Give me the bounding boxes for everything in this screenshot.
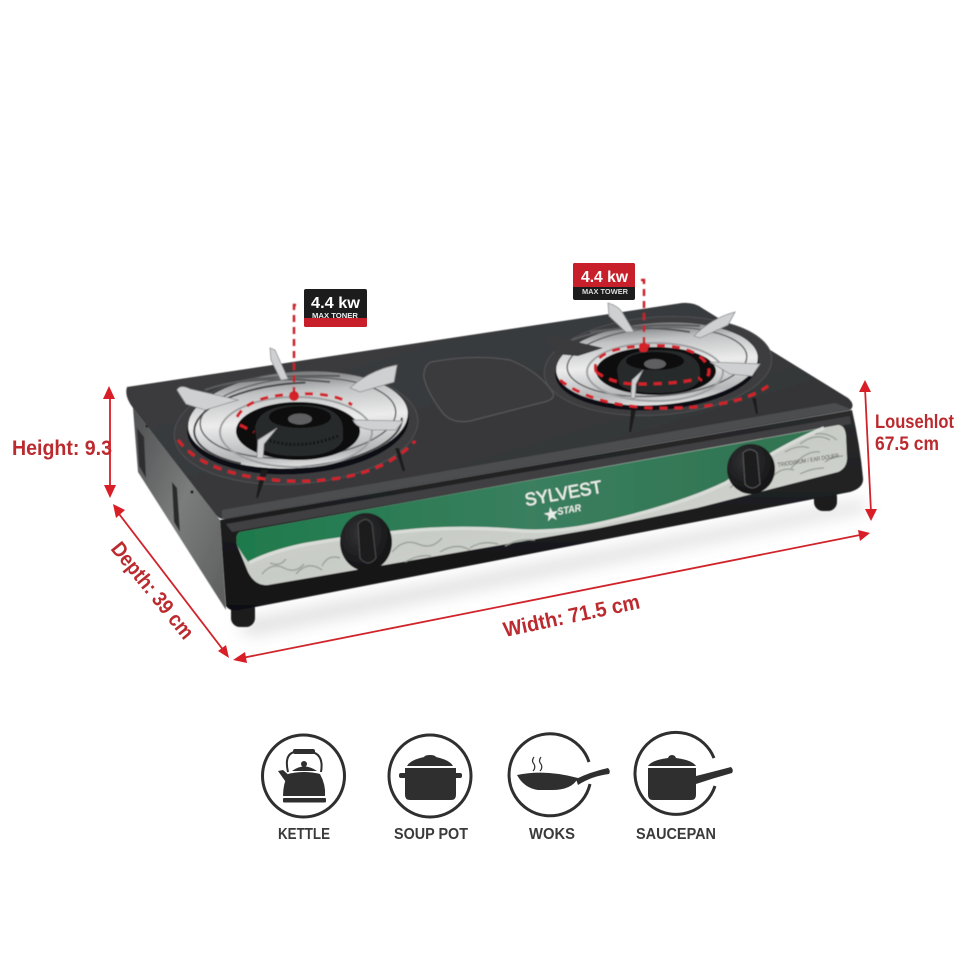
front body: [220, 410, 863, 610]
left burner: [170, 305, 422, 498]
label: saucepan: SAUCEPAN: [636, 826, 716, 843]
icon: soup pot: [389, 735, 471, 817]
height dimension: Height: 9.3: [12, 437, 112, 460]
green band: [236, 428, 824, 563]
brand logo: STAR: [557, 503, 583, 518]
dashed leader: [636, 280, 644, 344]
depth dimension: Depth: 39 cm: [106, 538, 198, 644]
red dashed circles: [178, 394, 415, 481]
callout: right burner power: [573, 263, 635, 300]
hob recess: [424, 357, 553, 422]
brand logo: [523, 477, 604, 527]
top plate front lip: [222, 403, 851, 519]
callout: right burner power: 4.4 kw: [581, 269, 629, 286]
fascia top band: [226, 416, 851, 532]
panel: front fascia: [226, 416, 851, 585]
label: soup pot: SOUP POT: [394, 826, 468, 843]
feet: [231, 488, 837, 627]
red marker dot: [289, 391, 299, 401]
ring reflections: [565, 322, 749, 402]
right knob: [727, 444, 775, 494]
right burner: [541, 280, 775, 432]
label: kettle: KETTLE: [278, 826, 330, 843]
icon: kettle: [262, 735, 344, 817]
lower support legs: [629, 398, 758, 432]
pan ring shadow: [552, 319, 762, 417]
height dimension: [12, 386, 116, 498]
ring reflections: [191, 371, 405, 474]
red dashed circles: [560, 345, 768, 408]
depth dimension: [106, 504, 229, 658]
width dimension: Width: 71.5 cm: [501, 590, 642, 642]
panel fine print: TRIODISIUM / EAR DOUER: [777, 453, 840, 469]
width dimension: [233, 530, 870, 663]
burner cap: [255, 405, 343, 456]
pan supports: [177, 348, 403, 458]
left knob: [340, 513, 392, 571]
outer recess ring: [541, 309, 775, 423]
outer recess ring: [170, 364, 422, 492]
pan ring steel: [553, 316, 761, 412]
right side dimension: 67.5 cm: [875, 434, 939, 455]
left side wall: [133, 408, 226, 610]
brand logo: SYLVEST: [523, 477, 604, 510]
dark support on left: [548, 335, 603, 356]
gas stove: [126, 280, 863, 627]
pan ring shadow: [184, 368, 412, 482]
callout: left burner power: 4.4 kw: [311, 295, 361, 312]
pan supports: [608, 303, 760, 398]
silver swoosh: [249, 428, 824, 563]
label: woks: WOKS: [529, 826, 575, 843]
icon: saucepan: [635, 732, 733, 814]
pan ring steel: [185, 364, 411, 476]
burner cap: [617, 350, 700, 393]
callout: right burner power: MAX TOWER: [582, 287, 629, 296]
callout: left burner power: MAX TONER: [312, 311, 359, 320]
brand logo: ★: [541, 503, 562, 527]
dashed leader: [294, 305, 301, 394]
cooktop shadow: [235, 500, 870, 636]
red marker dot: [639, 343, 648, 352]
top plate: [126, 303, 853, 519]
lower support legs: [256, 448, 405, 498]
inner dark opening: [596, 347, 716, 395]
fascia silver base: [236, 425, 847, 585]
icon: wok: [509, 734, 610, 816]
callout: left burner power: [304, 289, 367, 327]
right side dimension: [859, 380, 955, 521]
inner dark opening: [236, 402, 360, 460]
silver filigree: [262, 434, 843, 574]
